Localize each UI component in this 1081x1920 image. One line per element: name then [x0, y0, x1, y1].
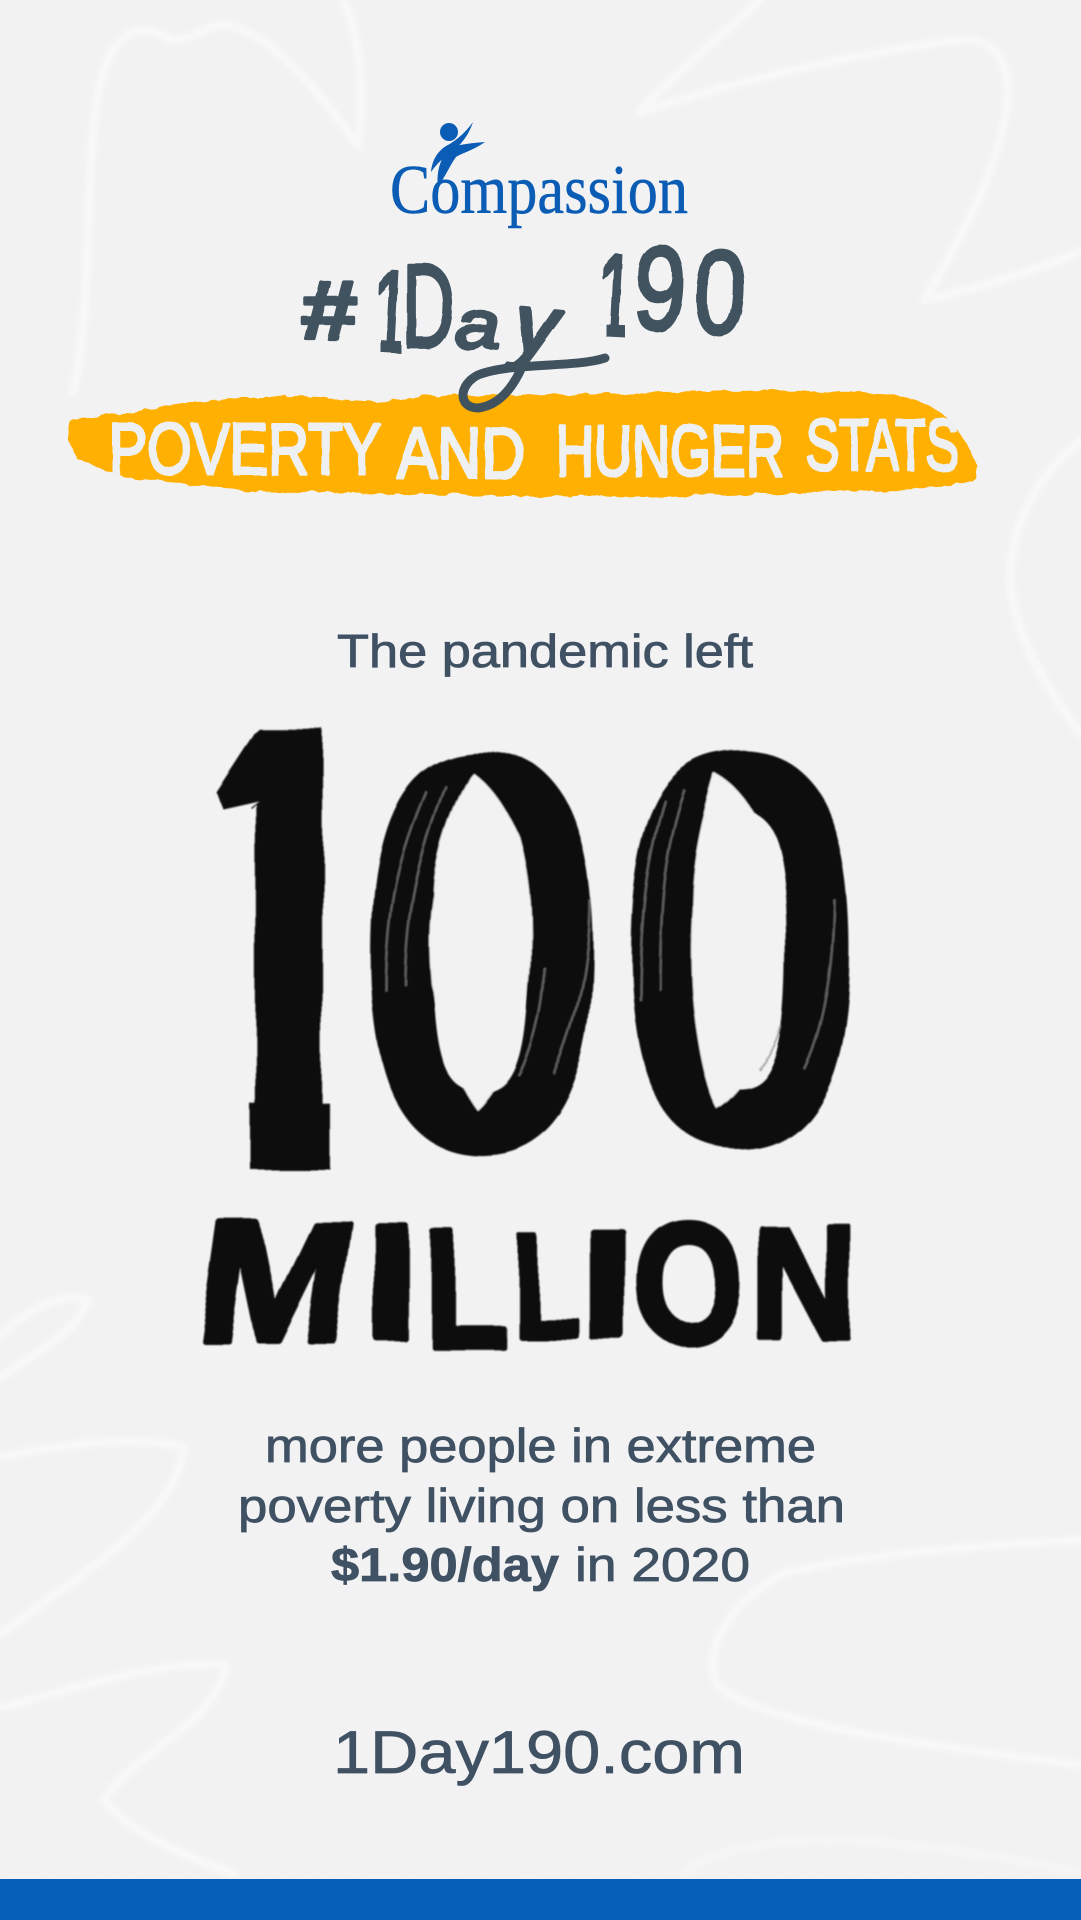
yellow brush banner — [68, 391, 979, 497]
banner text: POVERTY — [109, 410, 381, 490]
word MILLION: O — [634, 1187, 743, 1377]
hashtag title: 1 — [369, 247, 413, 378]
description text: $1.90/day — [331, 1538, 559, 1591]
y flourish — [463, 352, 605, 408]
hashtag title: # — [301, 263, 357, 357]
banner text: STATS — [806, 406, 959, 486]
hashtag title: 9 — [631, 220, 690, 356]
hashtag title: D — [402, 240, 454, 372]
description text — [238, 1419, 845, 1591]
description text: poverty living on less than — [238, 1479, 845, 1532]
big number 100 — [216, 726, 851, 1172]
digit 1: 1 — [141, 590, 414, 1305]
hashtag title — [300, 244, 744, 364]
word MILLION: I — [366, 1191, 419, 1375]
description text: more people in extreme — [265, 1419, 816, 1472]
intro text: The pandemic left — [337, 625, 753, 677]
description text: in 2020 — [575, 1538, 750, 1591]
word MILLION: N — [750, 1193, 858, 1373]
word MILLION: L — [425, 1199, 508, 1383]
hashtag title: a — [455, 287, 500, 363]
wordmark: Compassion — [390, 152, 688, 229]
hashtag title: 1 — [593, 231, 637, 362]
hashtag title: y — [505, 276, 567, 376]
first digit 0: 0 — [351, 633, 612, 1270]
logo: Compassion — [390, 122, 688, 229]
bottom blue bar — [0, 1879, 1081, 1920]
icon: Compassion figure — [431, 122, 485, 186]
banner text: HUNGER — [556, 412, 784, 492]
hashtag title: 0 — [691, 224, 750, 360]
word MILLION: L — [512, 1206, 580, 1367]
word MILLION: M — [187, 1186, 367, 1376]
banner text — [109, 406, 959, 494]
website url: 1Day190.com — [333, 1719, 745, 1786]
word MILLION: I — [580, 1198, 636, 1371]
word MILLION — [187, 1186, 858, 1383]
banner text: AND — [397, 414, 525, 494]
second digit 0: 0 — [613, 635, 869, 1266]
